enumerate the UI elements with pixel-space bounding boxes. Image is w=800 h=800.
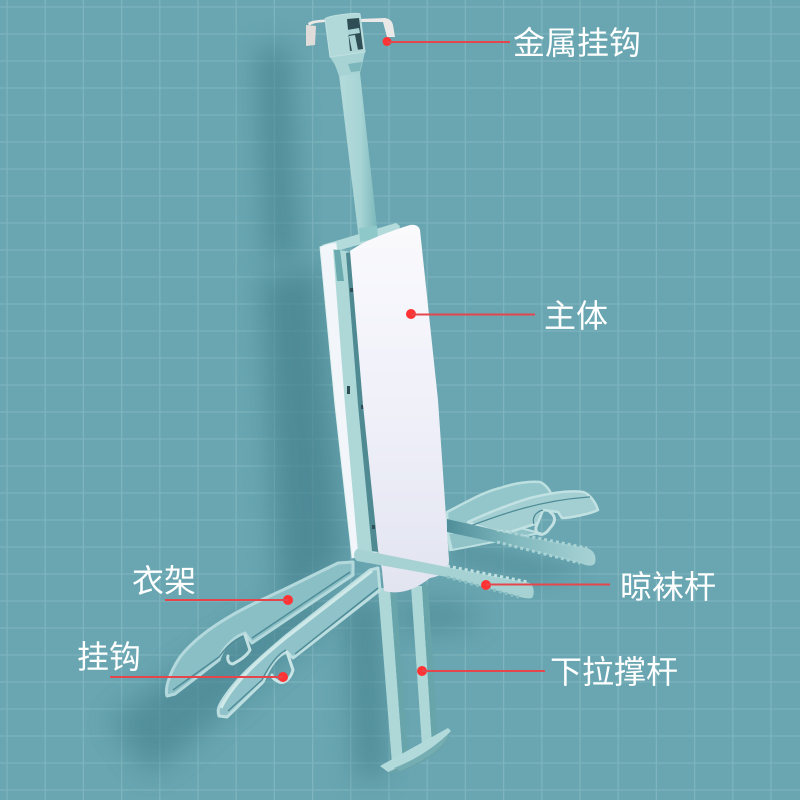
left pull-down rod [378, 588, 403, 764]
right pull-down rod [411, 586, 432, 746]
rear hanger hook [228, 635, 250, 664]
lower rod teeth [447, 566, 528, 582]
label: drying rod: 晾袜杆 [620, 569, 716, 605]
label: metal hook: 金属挂钩 [513, 25, 641, 61]
label: hook: 挂钩 [77, 639, 141, 675]
label: body: 主体 [544, 298, 608, 334]
callout lines [110, 37, 610, 682]
front left hanger [218, 568, 380, 717]
stem neck [330, 52, 365, 76]
lower drying rod [354, 549, 534, 598]
side rail dark groove [346, 252, 379, 552]
callout line: metal hook [382, 37, 510, 46]
upper drying rod [447, 519, 596, 566]
metal wire hook [306, 18, 395, 46]
side rail inner teal [333, 249, 379, 552]
right hangers [447, 482, 598, 566]
callout line: hanger [165, 595, 293, 605]
callout line: drying rod [481, 580, 610, 590]
front right hanger [468, 491, 598, 532]
label: pull-down rod: 下拉撑杆 [550, 654, 678, 690]
right hanger hook [536, 512, 554, 534]
hook head [325, 13, 365, 57]
front panel [350, 225, 449, 592]
rear right hanger [447, 482, 551, 550]
front hanger groove [228, 588, 378, 711]
side rail white [320, 243, 378, 558]
lower rod body [354, 549, 534, 598]
callout line: body [406, 309, 535, 319]
main body [306, 13, 449, 592]
rear hanger groove [173, 572, 350, 690]
front hanger groove [470, 497, 590, 526]
side rail top socket [334, 250, 344, 281]
small screws [347, 288, 375, 529]
stem [306, 13, 395, 240]
stem shaft [339, 73, 378, 240]
left hangers [166, 562, 380, 717]
callout line: hook [110, 672, 288, 682]
rear left hanger [166, 562, 353, 696]
pull-down rod foot [388, 733, 450, 773]
rear hanger lower blade [448, 528, 540, 550]
upper rod teeth [497, 530, 587, 563]
upper rod body [447, 519, 596, 566]
stem base overlap [359, 226, 378, 242]
lower pull-down support rods [378, 585, 451, 773]
rear cover bar [322, 223, 400, 250]
front hanger ridge [221, 571, 372, 708]
label: hanger: 衣架 [132, 563, 196, 599]
drop shadows [110, 45, 590, 780]
front hanger hook [272, 652, 293, 682]
callout line: pull-down rod [417, 666, 545, 676]
